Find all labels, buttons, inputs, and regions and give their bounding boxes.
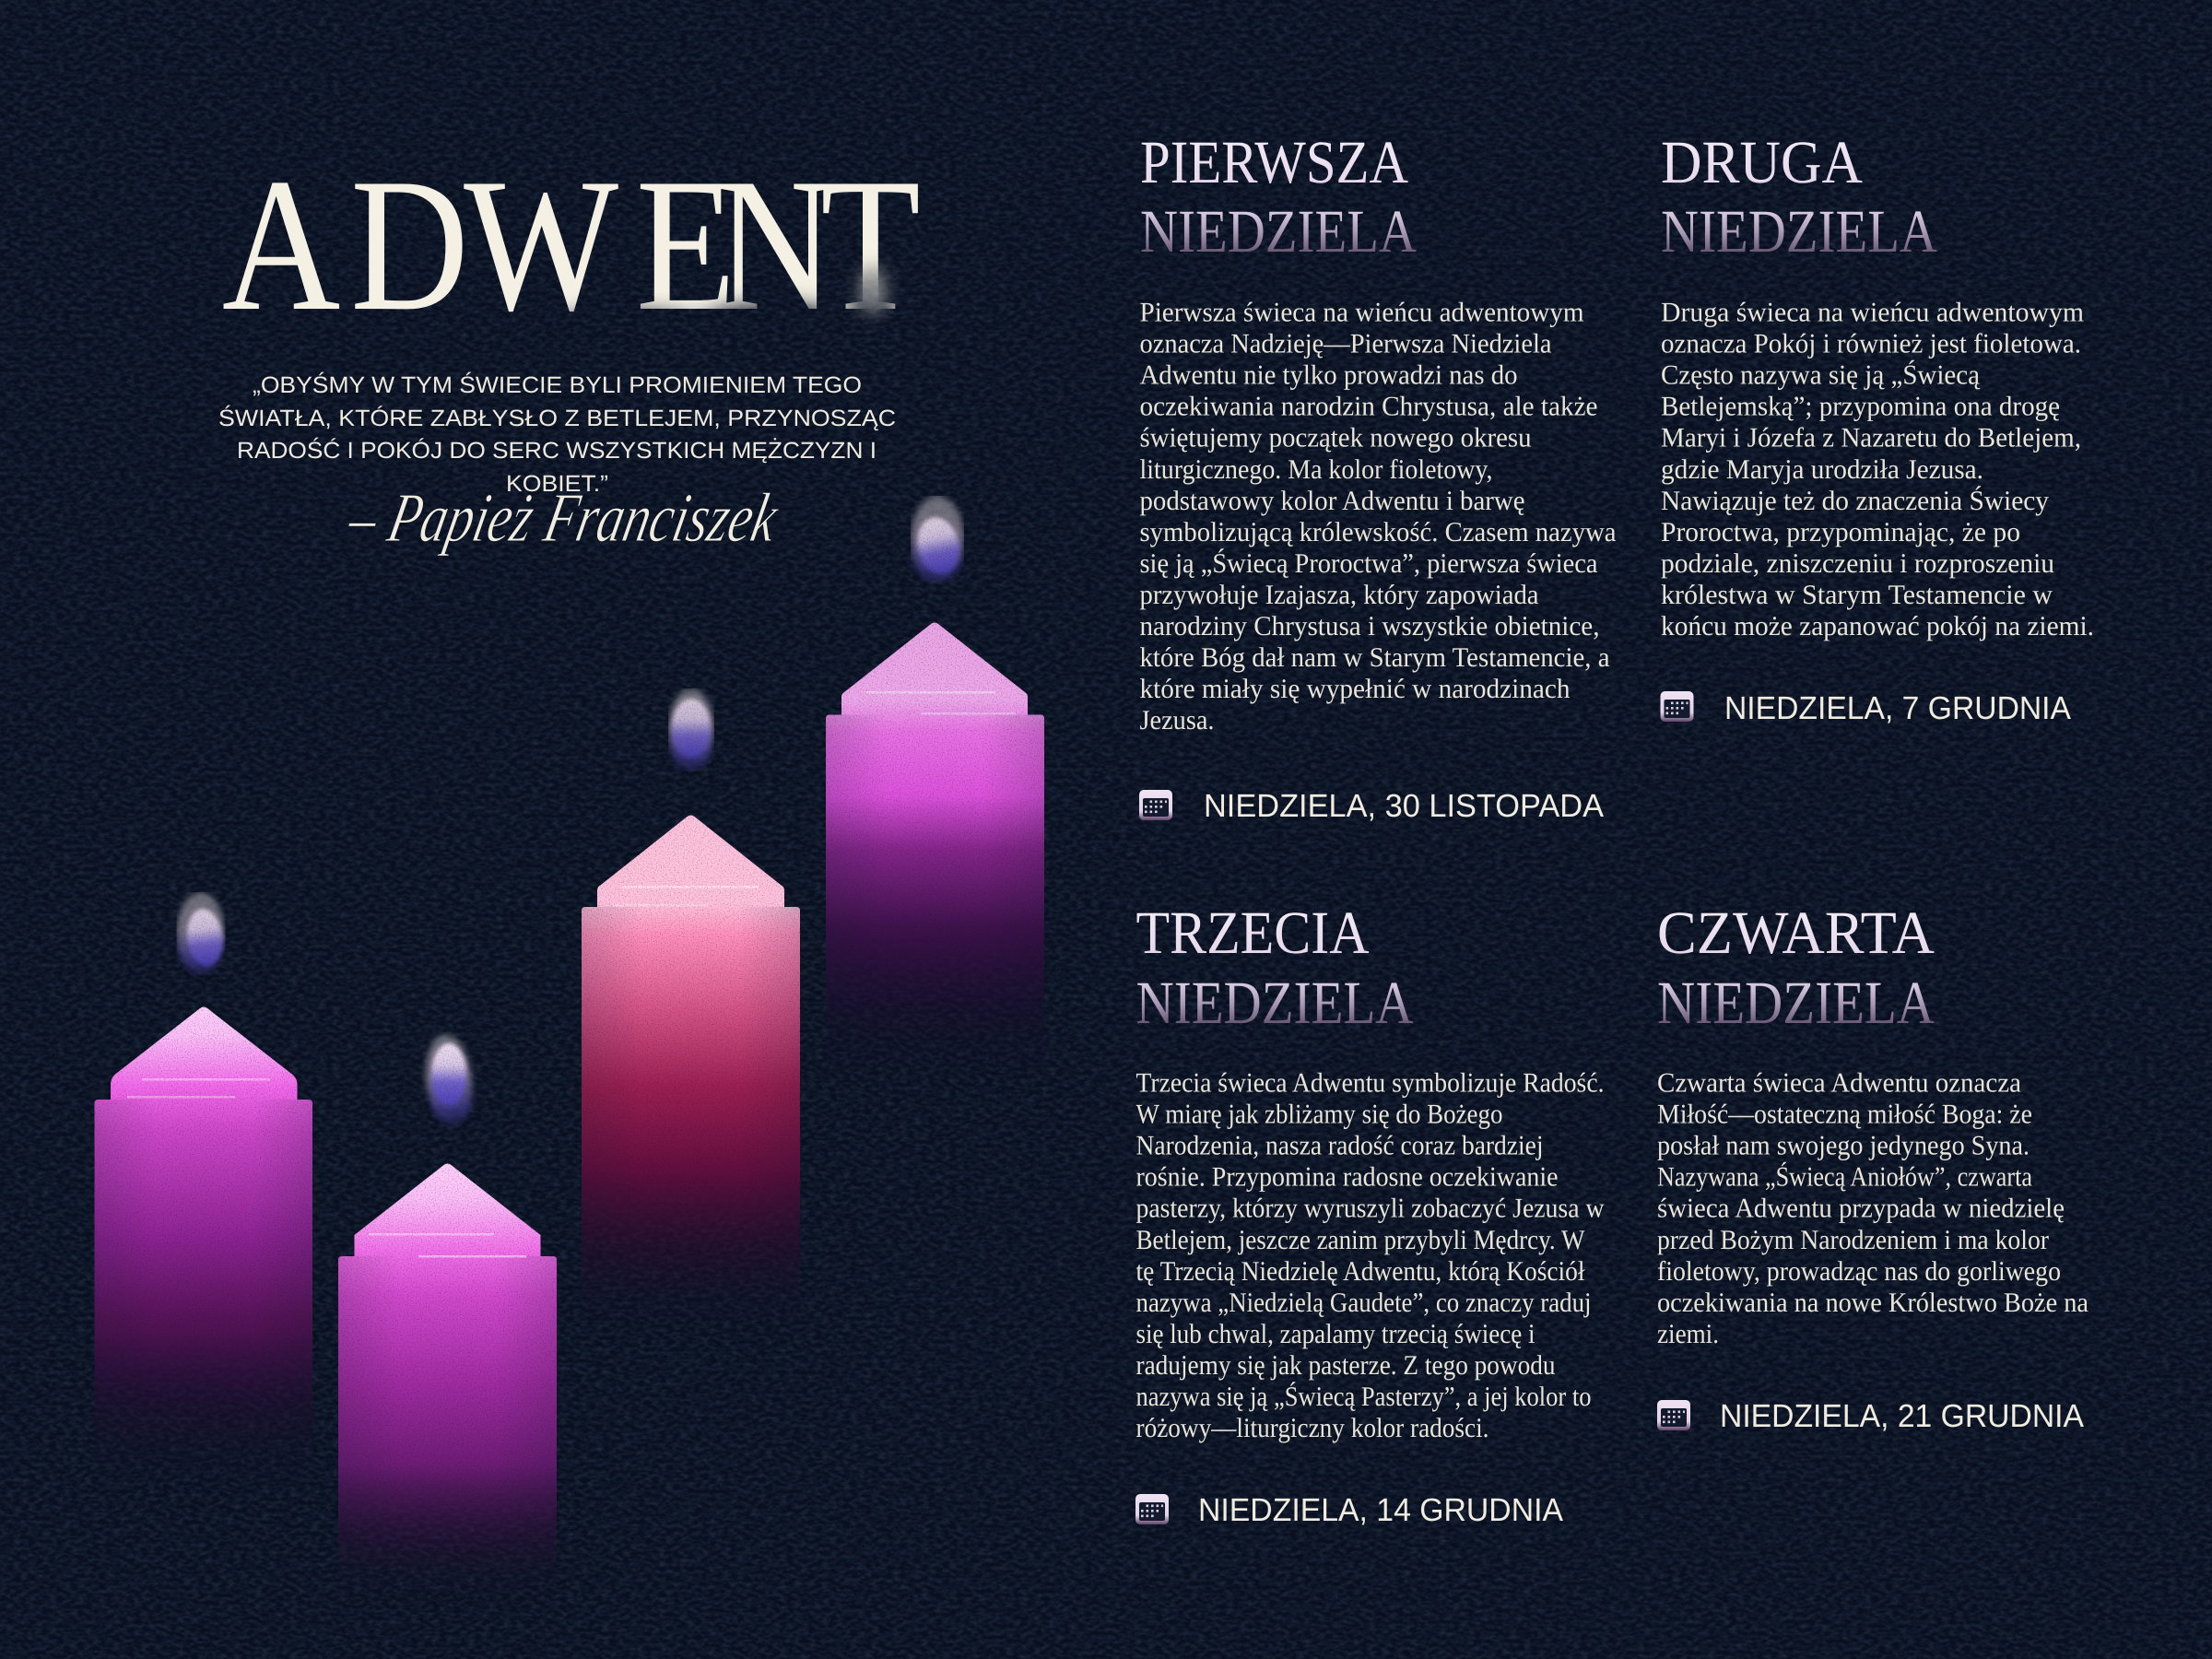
body text: trzecia: się lub chwal, zapalamy trzecią świecę i [1135,1319,1535,1349]
flame 4 [911,496,964,584]
body text: trzecia: radujemy się jak pasterze. Z tego powodu [1135,1350,1556,1381]
body text: czwarta: Miłość—ostateczną miłość Boga: że [1657,1100,2032,1130]
candle body 3 [582,815,800,1288]
body text: trzecia: nazywa się ją „Świecą Pasterzy”, a jej kolor to [1135,1382,1591,1412]
body text: pierwsza: które miały się wypełnić w narodzinach [1139,674,1571,704]
body text: druga: Nawiązuje też do znaczenia Świecy [1661,486,2049,516]
heading: pierwsza niedziela [1140,129,1417,265]
body text: czwarta: Czwarta świeca Adwentu oznacza [1657,1067,2021,1099]
body text: druga: Często nazywa się ją „Świecą [1661,360,1981,391]
quote attribution: – Papież Franciszek [342,479,785,557]
body text: druga [1661,297,2094,641]
body text: druga: oznacza Pokój i również jest fioletowa. [1661,329,2081,359]
body text: pierwsza: przywołuje Izajasza, który zapowiada [1139,580,1539,610]
body text: druga: Betlejemską”; przypomina ona drogę [1661,392,2060,422]
candle body 4 [826,623,1044,1040]
date: 7 grudnia: NIEDZIELA, 7 GRUDNIA [1724,690,2072,726]
panel: czwarta niedziela [1657,900,2088,1434]
date: 21 grudnia: NIEDZIELA, 21 GRUDNIA [1720,1398,2085,1434]
body text: czwarta: fioletowy, prowadząc nas do gorliwego [1657,1256,2061,1287]
body text: druga: końcu może zapanować pokój na ziemi. [1661,611,2094,641]
body text: pierwsza [1139,297,1617,735]
body text: trzecia [1135,1067,1605,1443]
flame 3 [668,688,714,771]
heading: trzecia niedziela: TRZECIA [1135,900,1370,967]
heading: druga niedziela: DRUGA [1661,129,1863,196]
heading: trzecia niedziela [1135,900,1414,1037]
quote text: RADOŚĆ I POKÓJ DO SERC WSZYSTKICH MĘŻCZYZN I [237,437,877,464]
body text: pierwsza: świętujemy początek nowego okresu [1139,423,1532,453]
body text: pierwsza: narodziny Chrystusa i wszystkie obietnice, [1139,611,1600,641]
flame 2 [421,1032,477,1128]
body text: czwarta: ziemi. [1657,1319,1719,1349]
body text: pierwsza: liturgicznego. Ma kolor fioletowy, [1139,454,1493,485]
body text: druga: Maryi i Józefa z Nazaretu do Betlejem, [1661,423,2081,453]
body text: pierwsza: oczekiwania narodzin Chrystusa, ale także [1139,392,1598,422]
title glow under T [860,266,886,314]
quote text: KOBIET.” [506,471,608,497]
body text: czwarta: Nazywana „Świecą Aniołów”, czwarta [1657,1162,2032,1193]
title: ADWENT [222,139,921,350]
heading: druga niedziela [1661,129,1937,265]
body text: trzecia: pasterzy, którzy wyruszyli zobaczyć Jezusa w [1135,1194,1605,1224]
body text: czwarta [1657,1067,2088,1349]
body text: czwarta: posłał nam swojego jedynego Syna. [1657,1131,2030,1161]
date: 14 grudnia: NIEDZIELA, 14 GRUDNIA [1198,1492,1564,1528]
heading: pierwsza niedziela: NIEDZIELA [1140,198,1417,265]
body text: druga: Druga świeca na wieńcu adwentowym [1661,297,2084,328]
candle 1 with flame [94,892,312,1493]
heading: druga niedziela: NIEDZIELA [1661,198,1937,265]
body text: czwarta: oczekiwania na nowe Królestwo Boże na [1657,1288,2088,1318]
quote text [218,371,896,497]
heading: czwarta niedziela: CZWARTA [1657,900,1935,967]
quote text: „OBYŚMY W TYM ŚWIECIE BYLI PROMIENIEM TEGO [253,371,862,398]
panel: trzecia niedziela [1135,900,1605,1528]
body text: pierwsza: które Bóg dał nam w Starym Testamencie, a [1139,642,1609,673]
body text: pierwsza: symbolizującą królewskość. Czasem nazywa [1139,517,1617,547]
heading: czwarta niedziela [1657,900,1935,1037]
body text: trzecia: tę Trzecią Niedzielę Adwentu, którą Kościół [1135,1256,1585,1287]
body text: pierwsza: Pierwsza świeca na wieńcu adwentowym [1139,297,1583,328]
body text: trzecia: nazywa „Niedzielą Gaudete”, co znaczy raduj [1135,1288,1591,1318]
body text: pierwsza: Jezusa. [1139,705,1215,735]
body text: trzecia: Trzecia świeca Adwentu symbolizuje Radość. [1135,1067,1604,1099]
panel: druga niedziela [1661,129,2094,726]
heading: czwarta niedziela: NIEDZIELA [1657,970,1935,1037]
candle body 1 [94,1006,312,1438]
body text: pierwsza: podstawowy kolor Adwentu i barwę [1139,486,1524,516]
heading: pierwsza niedziela: PIERWSZA [1140,129,1408,196]
candle 3 with flame [582,688,800,1346]
body text: druga: gdzie Maryja urodziła Jezusa. [1661,454,1983,485]
body text: czwarta: świeca Adwentu przypada w niedzielę [1657,1194,2065,1224]
candle 2 with flame [338,1032,557,1613]
body text: trzecia: różowy—liturgiczny kolor radości. [1135,1413,1489,1443]
body text: czwarta: przed Bożym Narodzeniem i ma kolor [1657,1225,2049,1255]
heading: trzecia niedziela: NIEDZIELA [1135,970,1414,1037]
candle 4 with flame [826,496,1044,1088]
body text: druga: Proroctwa, przypominając, że po [1661,517,2020,547]
date: 30 listopada: NIEDZIELA, 30 LISTOPADA [1204,788,1605,824]
body text: druga: podziale, zniszczeniu i rozproszeniu [1661,548,2054,579]
body text: trzecia: Betlejem, jeszcze zanim przybyli Mędrcy. W [1135,1225,1585,1255]
candle body 2 [338,1163,557,1565]
body text: pierwsza: Adwentu nie tylko prowadzi nas do [1139,360,1517,391]
body text: trzecia: rośnie. Przypomina radosne oczekiwanie [1135,1162,1558,1193]
quote text: ŚWIATŁA, KTÓRE ZABŁYSŁO Z BETLEJEM, PRZYNOSZĄC [218,405,896,431]
flame 1 [177,892,225,975]
body text: pierwsza: oznacza Nadzieję—Pierwsza Niedziela [1139,329,1552,359]
body text: trzecia: W miarę jak zbliżamy się do Bożego [1135,1100,1502,1130]
body text: trzecia: Narodzenia, nasza radość coraz bardziej [1135,1131,1543,1161]
body text: pierwsza: się ją „Świecą Proroctwa”, pierwsza świeca [1139,548,1598,579]
panel: pierwsza niedziela [1139,129,1617,824]
body text: druga: królestwa w Starym Testamencie w [1661,580,2053,610]
